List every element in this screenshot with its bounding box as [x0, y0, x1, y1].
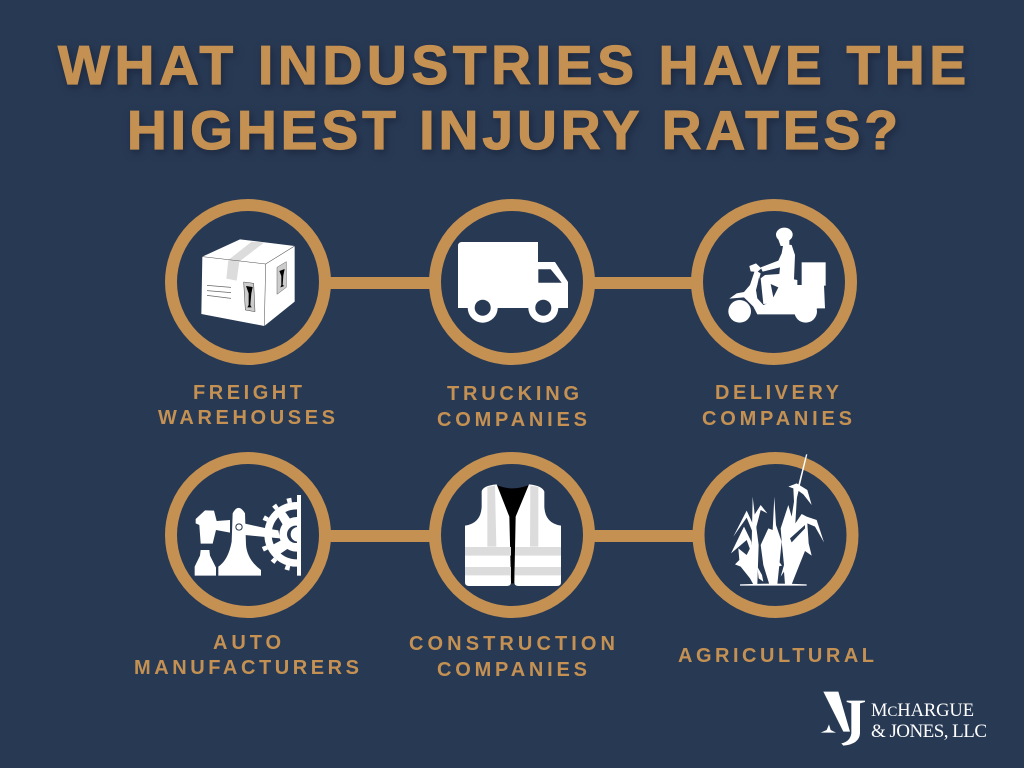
- label: delivery companies: DELIVERY: [715, 382, 840, 404]
- panel: construction companies: [409, 458, 615, 681]
- icon: truck: [458, 242, 568, 323]
- label: auto manufacturers: AUTO: [213, 632, 281, 654]
- logo text: & JONES, LLC: [871, 721, 987, 742]
- label: freight warehouses: [158, 382, 335, 429]
- icon: safety vest: [465, 484, 561, 586]
- connector: construction to agricultural: [590, 530, 698, 542]
- icon: machinery and gear: [194, 495, 301, 576]
- label: construction companies: CONSTRUCTION: [409, 633, 615, 655]
- label: delivery companies: [702, 382, 852, 430]
- label: freight warehouses: FREIGHT: [193, 382, 302, 404]
- panel: agricultural: [678, 454, 874, 667]
- label: freight warehouses: WAREHOUSES: [158, 407, 335, 429]
- logo text: MCHARGUE: [871, 701, 974, 721]
- panel: freight warehouses: [158, 205, 335, 429]
- title: WHAT INDUSTRIES HAVE THE: [58, 34, 966, 96]
- title: [58, 34, 966, 161]
- label: auto manufacturers: MANUFACTURERS: [134, 657, 359, 679]
- label: construction companies: COMPANIES: [437, 659, 587, 681]
- icon: delivery scooter rider: [728, 228, 826, 323]
- label: trucking companies: TRUCKING: [447, 383, 579, 405]
- label: agricultural: AGRICULTURAL: [678, 645, 874, 667]
- panel: auto manufacturers: [134, 458, 359, 679]
- logo mark: [821, 692, 865, 746]
- logo text: [871, 701, 987, 742]
- label: trucking companies: COMPANIES: [437, 409, 587, 431]
- icon: cardboard box: [201, 239, 295, 326]
- connector: freight to trucking: [325, 277, 435, 289]
- panel: trucking companies: [435, 205, 589, 431]
- connector: auto to construction: [325, 530, 435, 542]
- connector: trucking to delivery: [590, 277, 697, 289]
- icon: corn plants: [731, 454, 824, 586]
- title: HIGHEST INJURY RATES?: [127, 99, 898, 161]
- label: delivery companies: COMPANIES: [702, 408, 852, 430]
- logo: McHargue & Jones, LLC: [821, 692, 987, 746]
- label: construction companies: [409, 633, 615, 681]
- label: trucking companies: [437, 383, 587, 431]
- panel: delivery companies: [697, 205, 852, 430]
- label: auto manufacturers: [134, 632, 359, 679]
